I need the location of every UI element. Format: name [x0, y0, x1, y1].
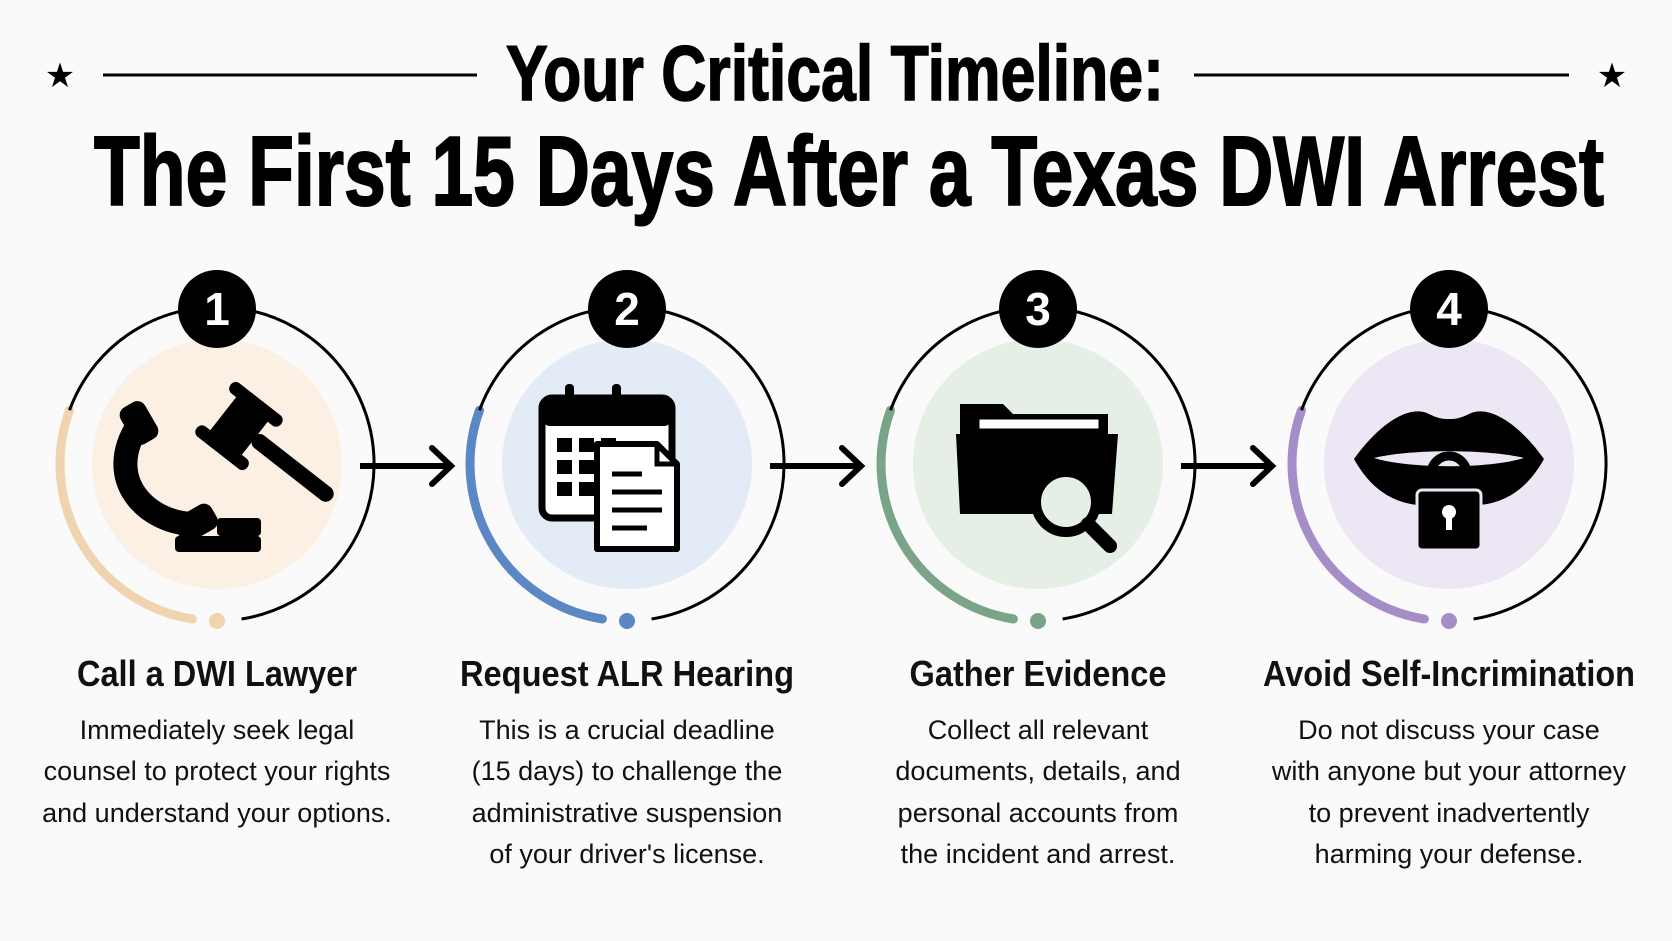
text: step 1: Immediately seek legal — [80, 715, 354, 745]
title line 1: Your Critical Timeline: — [506, 29, 1164, 117]
text: 3 — [1025, 283, 1051, 335]
text: step 3 — [895, 653, 1181, 869]
text: step 3: personal accounts from — [898, 798, 1178, 828]
step 3 — [881, 307, 1195, 629]
text: step 2: of your driver's license. — [489, 839, 765, 869]
text: step 2 — [460, 653, 794, 869]
text: step 4: with anyone but your attorney — [1271, 756, 1627, 786]
icon: folder and magnifier — [956, 404, 1118, 546]
text: step 3: documents, details, and — [895, 756, 1181, 786]
icon: calendar and document — [542, 384, 677, 549]
text: step 1: Call a DWI Lawyer — [77, 653, 357, 694]
text: step 3: the incident and arrest. — [901, 839, 1175, 869]
text: step 4: to prevent inadvertently — [1309, 798, 1590, 828]
text: step 1: and understand your options. — [42, 798, 392, 828]
arrow 1 — [360, 448, 451, 484]
arrow 2 — [770, 448, 861, 484]
title line 1: ★ — [45, 58, 75, 95]
text: step 4: harming your defense. — [1315, 839, 1583, 869]
text: step 2: administrative suspension — [472, 798, 782, 828]
title line 1 — [45, 29, 1627, 117]
text: 1 — [204, 283, 230, 335]
icon: phone and gavel — [116, 380, 353, 552]
text: step 3: Gather Evidence — [910, 653, 1166, 694]
text: 4 — [1436, 283, 1462, 335]
text: step 3: Collect all relevant — [928, 715, 1149, 745]
text: step 4 — [1263, 653, 1635, 869]
text: step 4: Avoid Self-Incrimination — [1263, 653, 1635, 694]
text: step 2: (15 days) to challenge the — [472, 756, 782, 786]
text: step 2: Request ALR Hearing — [460, 653, 794, 694]
title line 1: ★ — [1597, 58, 1627, 95]
step 1 — [60, 307, 374, 629]
arrow 3 — [1181, 448, 1272, 484]
icon: lips and padlock — [1354, 411, 1544, 550]
text: step 4: Do not discuss your case — [1298, 715, 1600, 745]
text: step 1 — [42, 653, 392, 828]
text: 2 — [614, 283, 640, 335]
step 2 — [470, 307, 784, 629]
step 4 — [1292, 307, 1606, 629]
text: step 1: counsel to protect your rights — [44, 756, 390, 786]
text: step 2: This is a crucial deadline — [479, 715, 775, 745]
